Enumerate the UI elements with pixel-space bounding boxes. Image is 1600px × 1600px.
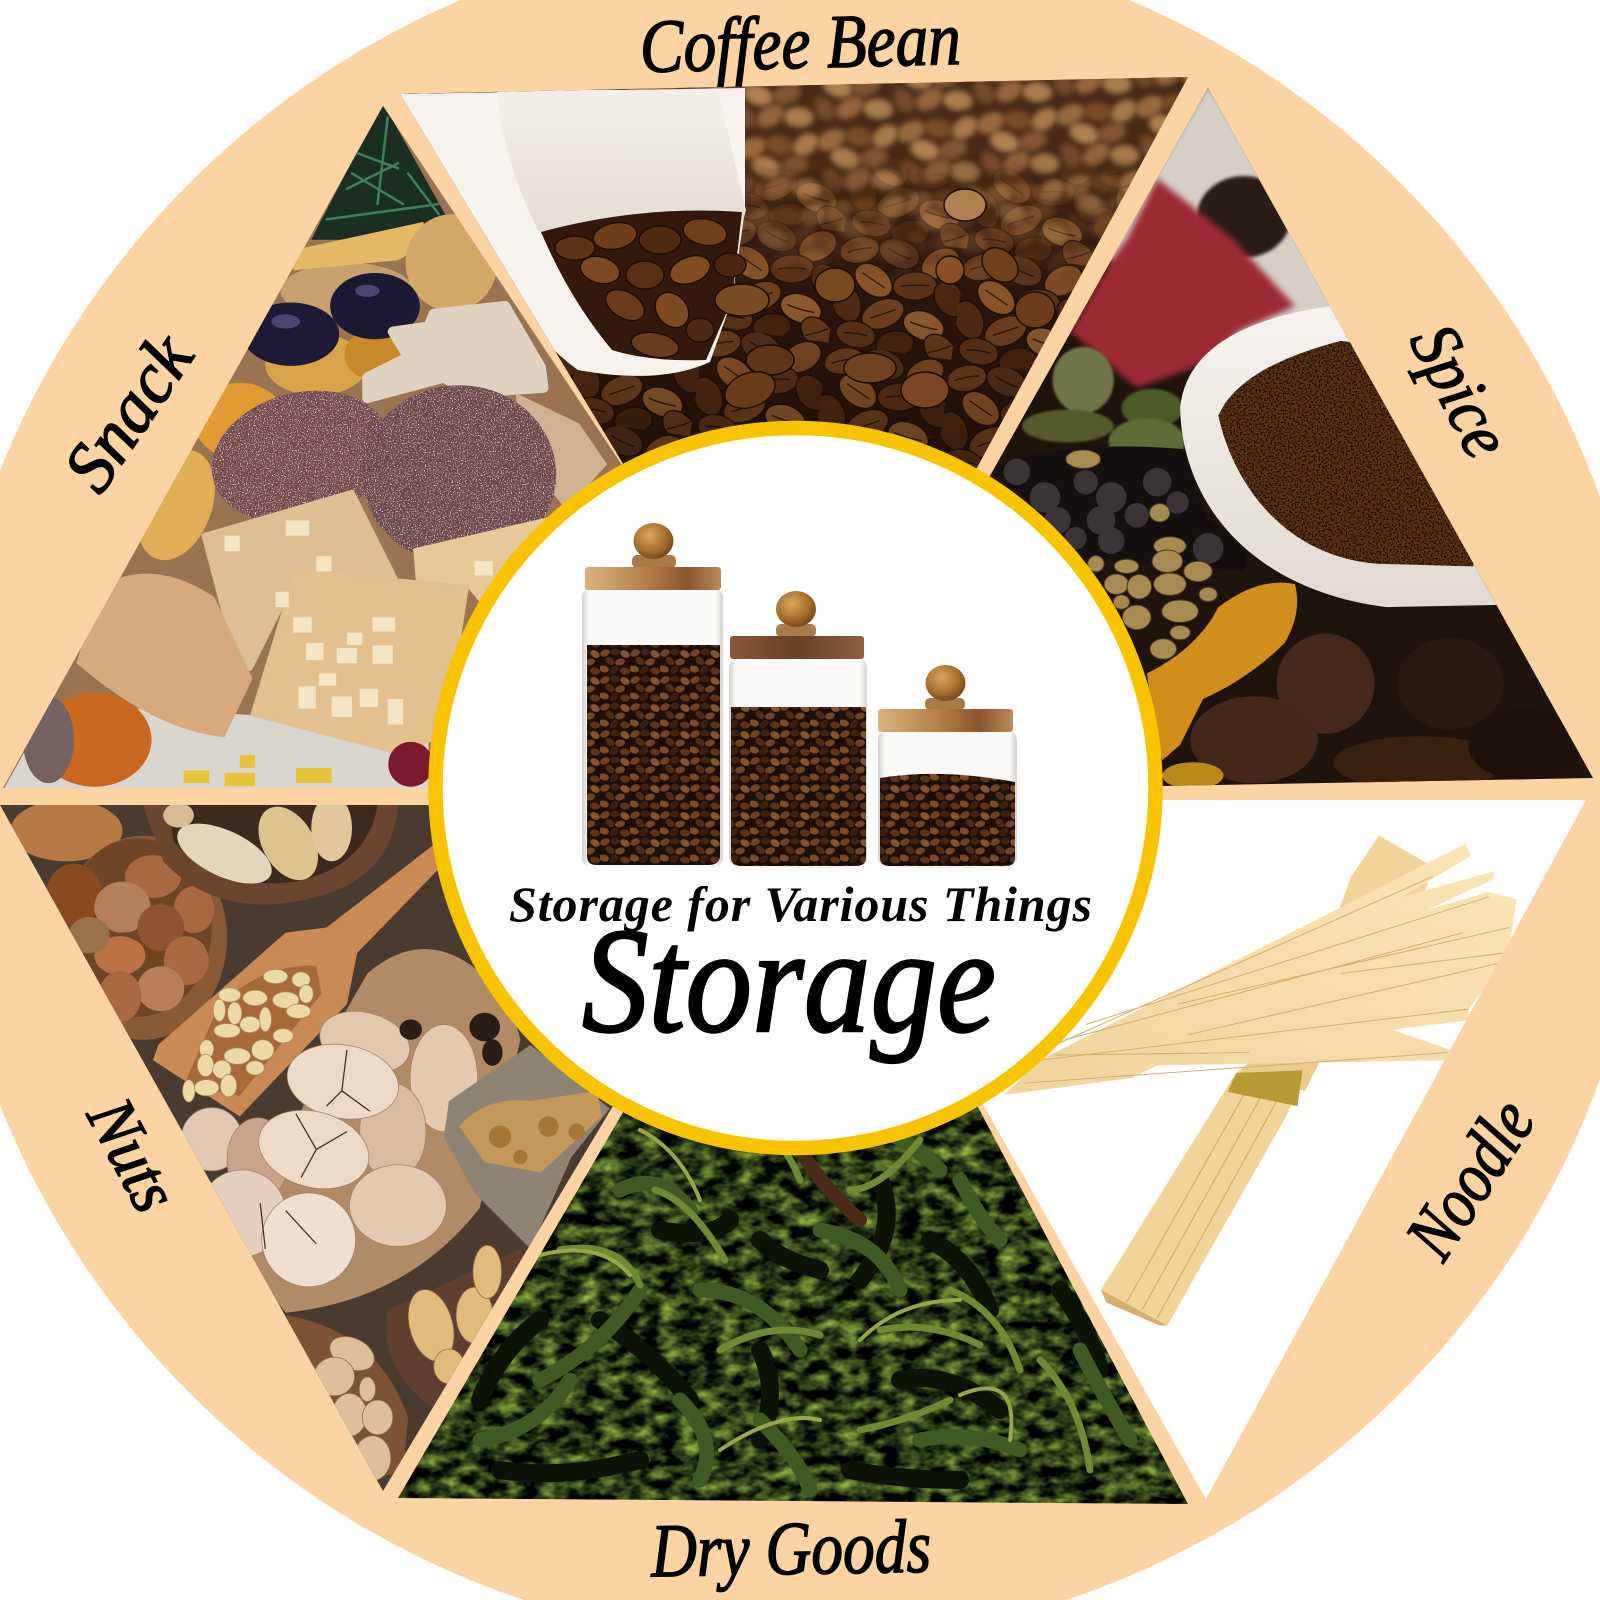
cardamom pods — [1021, 346, 1185, 450]
panel: coffee bean photo — [390, 70, 1200, 490]
icon: wooden scoop with pine nuts — [153, 841, 439, 1116]
blurred backdrop — [1110, 88, 1344, 342]
hazelnut and almond bowl — [10, 800, 227, 1040]
icon: white coffee cup — [400, 88, 746, 376]
main title: Storage — [582, 898, 996, 1064]
icon: lower tied noodle bundle — [1101, 1062, 1320, 1326]
wooden platter — [245, 949, 520, 1313]
highlighted foreground beans — [715, 189, 1055, 415]
icon: upper tip of noodle bundle — [1340, 836, 1428, 908]
icon: red chili — [1070, 179, 1295, 388]
jar: short — [878, 665, 1017, 868]
turmeric root — [1147, 583, 1297, 760]
label: snack: Snack — [47, 318, 210, 505]
plate — [4, 708, 429, 788]
label: noodle: Noodle — [1389, 1085, 1550, 1273]
brazil nut bowl — [143, 795, 398, 904]
icon: loose flat noodle strands — [1004, 843, 1517, 1095]
nut crumbs — [224, 520, 493, 724]
burlap sack with walnuts — [444, 1045, 610, 1249]
panel: nuts photo — [0, 805, 613, 1491]
jar: tall — [582, 523, 723, 867]
icon: star anise — [1197, 176, 1291, 258]
coriander seeds — [1066, 450, 1217, 659]
black peppercorns — [994, 446, 1249, 571]
tea leaves — [480, 1105, 1130, 1490]
dark seeds — [399, 1013, 503, 1066]
subtitle: Storage for Various Things — [509, 876, 1092, 932]
panel: dry goods tea photo — [398, 1106, 1188, 1504]
dark dried spices — [1162, 634, 1581, 789]
illustration: three coffee jars — [582, 523, 1017, 868]
hazelnut, cherry and zest — [23, 693, 433, 787]
pistachio bowl — [286, 1315, 408, 1481]
pecan cracks — [260, 1050, 370, 1249]
panel: snack photo — [3, 106, 622, 788]
pecans — [181, 1002, 478, 1287]
label: dry goods: Dry Goods — [649, 1505, 932, 1593]
label: nuts: Nuts — [72, 1085, 194, 1224]
panel: spice photo — [990, 88, 1593, 786]
label: spice: Spice — [1394, 312, 1526, 470]
white spice bowl — [1180, 306, 1514, 607]
jar: medium — [729, 591, 867, 868]
cashew bowl — [386, 1245, 526, 1412]
cookies and biscuits — [77, 214, 607, 753]
panel: noodle photo — [983, 800, 1586, 1499]
icon: pine branch — [311, 106, 446, 240]
central white circle with yellow ring — [436, 428, 1156, 1148]
